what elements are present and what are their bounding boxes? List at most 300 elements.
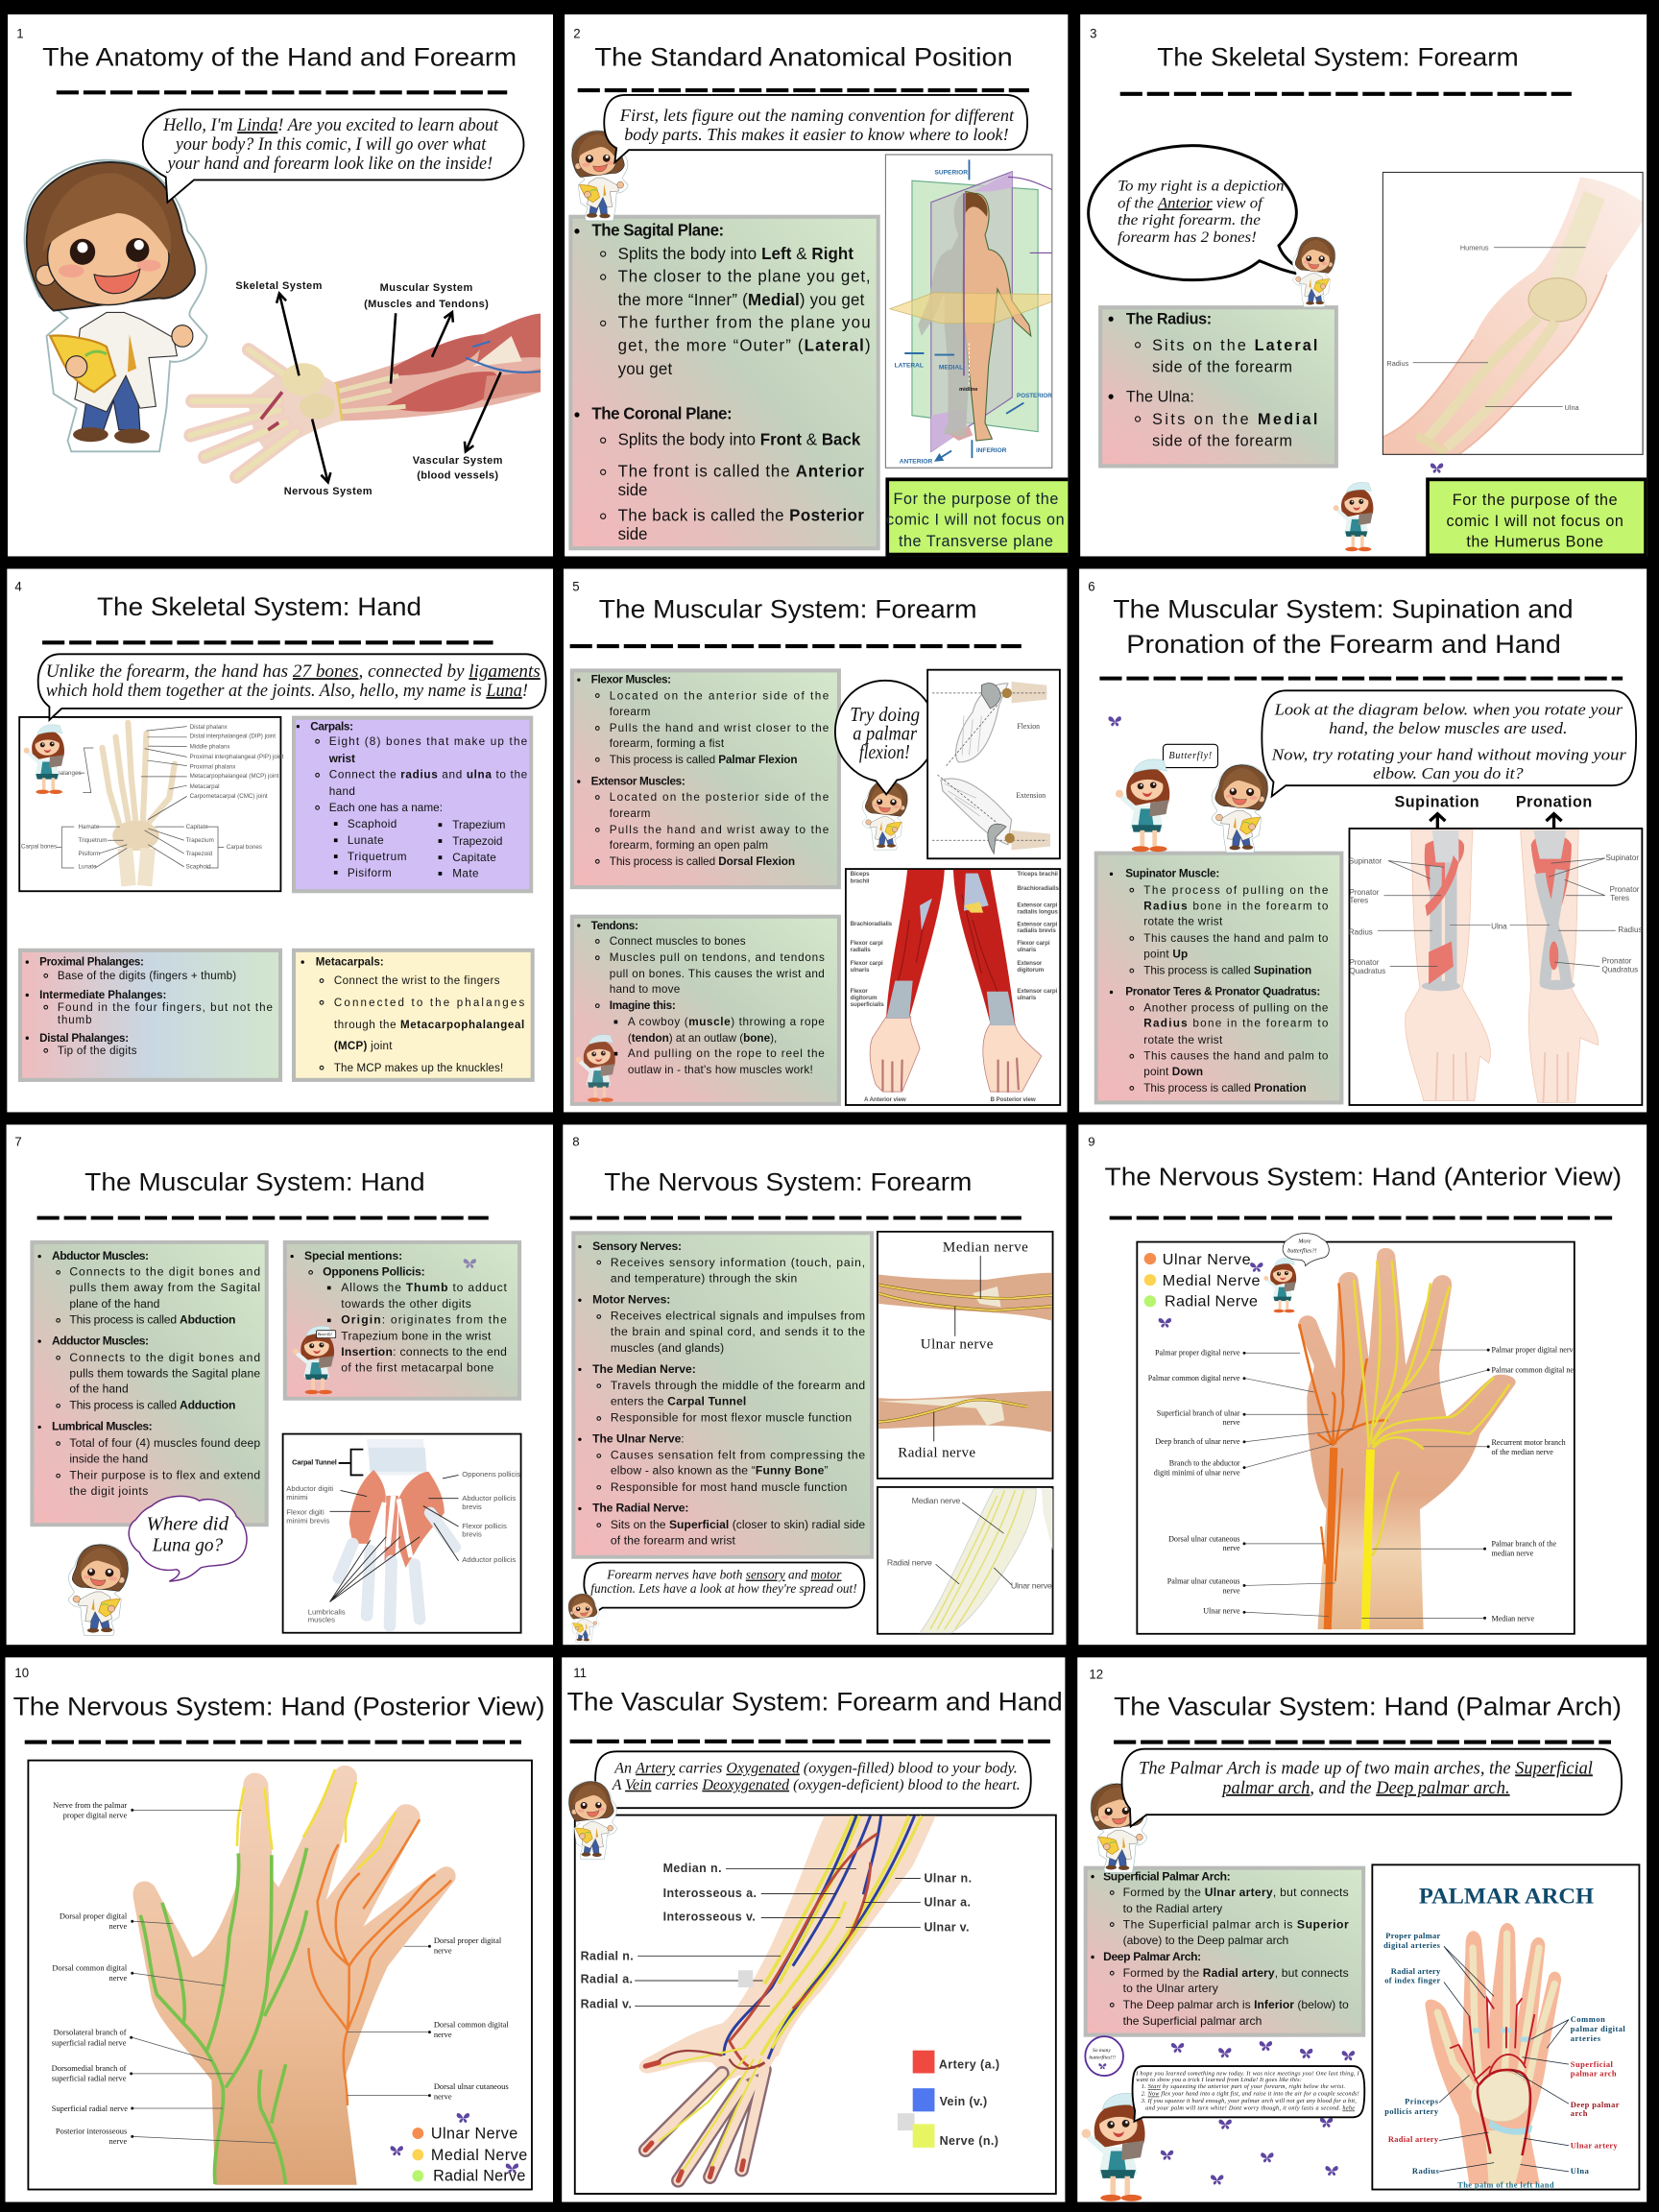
- purple bubble: so many butterflies: butterflies!!!: [1089, 2055, 1116, 2061]
- text box: flexor and extensor: Located on the posterior side of the: [610, 790, 830, 804]
- text box: tendons: (tendon) at an outlaw (bone),: [628, 1031, 777, 1045]
- text box: supinator and pronator: rotate the wrist: [1143, 1033, 1223, 1046]
- diagram: hand muscles: Opponens pollicis: [462, 1470, 520, 1479]
- text box: phalanges: Tip of the digits: [58, 1045, 137, 1057]
- text box: planes: The Coronal Plane:: [591, 404, 733, 423]
- illustration: median ulnar radial nerves: [878, 1232, 1053, 1479]
- text box: special mentions: Opponens Pollicis:: [323, 1265, 425, 1279]
- icon: butterfly: [506, 2163, 518, 2174]
- text box: carpals: Carpals:: [310, 719, 353, 733]
- nerve: radial green: [140, 1848, 307, 2184]
- text box: supinator and pronator: The process of pulling on the: [1143, 883, 1329, 897]
- text box: radius and ulna: side of the forearm: [1152, 433, 1292, 450]
- text box: abductor adductor lumbrical: [32, 1242, 267, 1525]
- text box: abductor adductor lumbrical: of the hand: [69, 1382, 129, 1396]
- page number 11: 11: [573, 1666, 587, 1680]
- diagram: posterior hand nerves: nerve: [108, 1973, 127, 1983]
- illustration: median ulnar radial nerves: Radial nerve: [898, 1446, 975, 1460]
- text box: planes: The closer to the plane you get,: [618, 267, 871, 286]
- diagram: hand muscles: Flexor digiti: [286, 1508, 325, 1516]
- character: Luna small: [293, 1326, 334, 1394]
- hand skeleton diagram: Triquetrum: [79, 837, 107, 844]
- text box: phalanges: Base of the digits (fingers + thumb): [58, 970, 236, 982]
- text box: palmar arches: The Superficial palmar arch is Superior: [1123, 1917, 1349, 1931]
- text box: flexor and extensor: This process is called Dorsal Flexion: [610, 854, 795, 868]
- diagram: posterior hand nerves: Dorsal ulnar cutaneous: [434, 2081, 509, 2091]
- note box: humerus: [1426, 477, 1647, 556]
- diagram: forearm muscles anterior and posterior: Biceps: [851, 871, 870, 878]
- legend: nerve colours: Medial Nerve: [1163, 1273, 1261, 1289]
- text box: metacarpals: Connected to the phalanges: [334, 997, 524, 1009]
- text box: tendons: [572, 917, 839, 1104]
- speech bubble: palmar flexion: [835, 681, 936, 795]
- speech bubble: palmar arch: The Palmar Arch is made up of two main arches, the Superficial: [1139, 1758, 1593, 1777]
- text box: abductor adductor lumbrical: inside the hand: [69, 1453, 148, 1466]
- diagram: hand muscles: minimi brevis: [286, 1517, 329, 1525]
- speech bubble: 27 bones: Unlike the forearm, the hand has 27 bones, connected by ligaments: [46, 662, 541, 682]
- speech bubble: artery and vein: A Vein carries Deoxygenated (oxygen-deficient) blood to the heart.: [612, 1777, 1021, 1793]
- diagram: hand muscles: Adductor pollicis: [462, 1555, 517, 1564]
- diagram: posterior hand nerves: Nerve from the palmar: [53, 1800, 127, 1810]
- speech bubble: palmar flexion: flexion!: [859, 742, 910, 763]
- tiny bubble: Butterfly: Butterfly!: [318, 1332, 333, 1336]
- diagram: anterior hand nerves: digiti minimi of ulnar nerve: [1154, 1469, 1240, 1477]
- diagram: anterior hand nerves: Palmar common digital nerve: [1492, 1365, 1584, 1374]
- hand skeleton diagram: Hamate: [79, 824, 100, 830]
- text box: flexor and extensor: Pulls the hand and wrist closer to the: [610, 721, 830, 734]
- hand skeleton diagram: Distal phalanx: [190, 724, 228, 731]
- diagram: forearm muscles anterior and posterior: Brachioradialis: [851, 921, 893, 927]
- diagram: flexion and extension: Extension: [1016, 791, 1046, 800]
- text box: palmar arches: Formed by the Radial artery, but connects: [1123, 1966, 1349, 1980]
- character: Luna on tendons box: [576, 1034, 615, 1102]
- diagram: forearm muscles anterior and posterior: Extensor carpi: [1017, 902, 1058, 908]
- legend: nerve colours: Radial Nerve: [433, 2168, 525, 2185]
- nerve: digital yellow: [237, 1769, 396, 1869]
- character: Linda small: [568, 1781, 617, 1859]
- speech bubble: closing trick: 1. Start by squeezing the anterior part of your forearm, right below the wrist.: [1142, 2083, 1345, 2090]
- diagram: forearm vessels and nerves: Radial v.: [581, 1997, 632, 2010]
- speech bubble: rotate your hand: Now, try rotating your hand without moving your: [1271, 745, 1626, 763]
- diagram: forearm vessels and nerves: [575, 1815, 1056, 2194]
- diagram: forearm vessels and nerves: Radial a.: [581, 1973, 633, 1986]
- legend: artery vein nerve: Nerve (n.): [940, 2134, 998, 2148]
- heading panel 1: The Anatomy of the Hand and Forearm: [42, 42, 517, 72]
- text box: flexor and extensor: forearm: [610, 806, 651, 820]
- hand skeleton diagram: Carpal bones: [21, 843, 57, 850]
- heading panel 11: The Vascular System: Forearm and Hand: [567, 1687, 1063, 1716]
- hand skeleton diagram: Lunate: [79, 864, 97, 871]
- diagram: posterior hand nerves: superficial radial nerve: [52, 2074, 127, 2083]
- diagram: forearm muscles anterior and posterior: ulnaris: [1017, 995, 1037, 1001]
- text box: special mentions: of the first metacarpal bone: [341, 1361, 494, 1375]
- diagram: anterior hand nerves: [1137, 1242, 1584, 1634]
- text box: palmar arches: The Deep palmar arch is Inferior (below) to: [1123, 1998, 1349, 2011]
- diagram: palmar arch hand: Radial artery: [1391, 1966, 1441, 1976]
- diagram: supination and pronation arms: Quadratus: [1349, 967, 1385, 975]
- diagram: forearm muscles anterior and posterior: superficialis: [851, 1001, 884, 1008]
- diagram: supination and pronation arms: Supinator: [1606, 854, 1639, 862]
- illustration: forearm nerves line drawing: Ulnar nerve: [1011, 1580, 1052, 1590]
- text box: palmar arches: to the Ulnar artery: [1123, 1982, 1219, 1995]
- diagram: anterior hand nerves: Palmar ulnar cutaneous: [1167, 1577, 1240, 1586]
- diagram: posterior hand nerves: [28, 1761, 532, 2190]
- diagram: posterior hand nerves: nerve: [108, 2136, 127, 2146]
- legend: nerve colours: Ulnar Nerve: [1163, 1252, 1251, 1268]
- note box: humerus: comic I will not focus on: [1446, 513, 1623, 530]
- speech bubble: closing trick: 3. If you squeeze it hard enough, your palmar arch will not get any blood for a bit,: [1141, 2098, 1357, 2104]
- text box: supinator and pronator: Supinator Muscle:: [1125, 867, 1219, 880]
- text box: nerves: Travels through the middle of the forearm and: [611, 1379, 865, 1392]
- cloud bubble: where did Luna go: [129, 1496, 247, 1581]
- panel 2: standard anatomical position: [565, 14, 1068, 556]
- text box: abductor adductor lumbrical: This process is called Adduction: [69, 1399, 235, 1411]
- diagram: anatomical planes: INFERIOR: [976, 447, 1007, 454]
- text box: special mentions: Special mentions:: [304, 1249, 402, 1262]
- page number 12: 12: [1089, 1667, 1103, 1681]
- diagram: forearm vessels and nerves: Ulnar v.: [924, 1921, 969, 1935]
- text box: metacarpals: (MCP) joint: [334, 1040, 393, 1052]
- diagram: forearm muscles anterior and posterior: Extensor carpi: [1017, 921, 1058, 927]
- diagram: posterior hand nerves: Dorsal proper digital: [434, 1936, 502, 1945]
- nerve: median yellow: [1354, 1261, 1510, 1629]
- text box: radius and ulna: Sits on the Lateral: [1152, 337, 1317, 354]
- hand skeleton diagram: [19, 717, 284, 891]
- speech bubble: forearm bones: the right forearm. the: [1118, 212, 1261, 228]
- text box: radius and ulna: side of the forearm: [1152, 358, 1292, 376]
- diagram: hand muscles: Lumbricalis: [308, 1608, 346, 1616]
- page number 3: 3: [1090, 26, 1096, 41]
- heading panel 10: The Nervous System: Hand (Posterior View): [13, 1692, 545, 1720]
- diagram: forearm muscles anterior and posterior: ulnaris: [851, 967, 870, 974]
- hand skeleton diagram: Capitate: [186, 824, 208, 830]
- text box: carpals: Scaphoid: [348, 817, 397, 830]
- text box: abductor adductor lumbrical: pulls them away from the Sagital: [69, 1281, 260, 1294]
- text box: tendons: hand to move: [610, 982, 681, 996]
- diagram: posterior hand nerves: nerve: [108, 1921, 127, 1931]
- panel 5: muscular system forearm: [564, 568, 1068, 1112]
- hand skeleton diagram: Phalanges: [53, 770, 82, 777]
- character: Linda small: [568, 1594, 599, 1643]
- text box: special mentions: Allows the Thumb to adduct: [341, 1281, 508, 1294]
- text box: flexor and extensor: Flexor Muscles:: [591, 672, 671, 686]
- diagram: forearm muscles anterior and posterior: Flexor: [851, 988, 868, 995]
- diagram: posterior hand nerves: nerve: [434, 1946, 452, 1956]
- diagram: forearm vessels and nerves: Radial n.: [581, 1949, 634, 1962]
- hand skeleton diagram: Distal interphalangeal (DIP) joint: [190, 733, 276, 740]
- diagram: forearm muscles anterior and posterior: B Posterior view: [991, 1096, 1036, 1103]
- text box: planes: The Sagital Plane:: [591, 221, 724, 239]
- diagram: forearm muscles anterior and posterior: Flexor carpi: [1017, 940, 1050, 947]
- heading panel 8: The Nervous System: Forearm: [604, 1167, 972, 1196]
- diagram: anterior hand nerves: Branch to the abductor: [1169, 1459, 1240, 1467]
- diagram: palmar arch hand: arch: [1571, 2108, 1588, 2118]
- speech bubble: rotate your hand: elbow. Can you do it?: [1373, 764, 1524, 782]
- text box: planes: side: [618, 525, 647, 543]
- diagram: posterior hand nerves: superficial radial nerve: [52, 2037, 127, 2047]
- text box: planes: get, the more “Outer” (Lateral): [618, 337, 871, 355]
- legend: artery vein nerve: Vein (v.): [940, 2095, 987, 2108]
- text box: supinator and pronator: Pronator Teres & Pronator Quadratus:: [1125, 984, 1320, 998]
- text box: carpals: Each one has a name:: [329, 801, 443, 814]
- label: Supination with arrow: Supination: [1394, 793, 1479, 811]
- text box: tendons: pull on bones. This causes the wrist and: [610, 967, 825, 980]
- diagram: palmar arch hand: arteries: [1571, 2033, 1601, 2043]
- label: Muscular System with arrows: Muscular System: [380, 282, 472, 294]
- text box: nerves: [573, 1233, 872, 1557]
- page number 5: 5: [572, 580, 580, 594]
- heading panel 12: The Vascular System: Hand (Palmar Arch): [1114, 1692, 1622, 1720]
- text box: tendons: A cowboy (muscle) throwing a rope: [628, 1015, 825, 1028]
- text box: supinator and pronator: Another process of pulling on the: [1143, 1001, 1329, 1015]
- note box: transverse plane: comic I will not focus on: [886, 512, 1065, 529]
- hand skeleton diagram: Carpometacarpal (CMC) joint: [190, 793, 268, 800]
- text box: planes: The further from the plane you: [618, 313, 871, 332]
- text box: supinator and pronator: Radius bone in the forearm to: [1143, 1017, 1329, 1030]
- speech bubble: artery and vein: [595, 1751, 1031, 1819]
- diagram: anterior hand nerves: Palmar proper digital nerve: [1492, 1346, 1577, 1355]
- illustration: hand and forearm anatomy: [190, 314, 541, 477]
- icon: butterfly: [457, 2113, 469, 2123]
- speech bubble: forearm bones: [1089, 146, 1302, 280]
- butterflies swarm: [1161, 2041, 1355, 2184]
- label: Pronation with arrow: [1516, 793, 1592, 830]
- illustration: forearm nerves line drawing: Radial nerve: [887, 1558, 932, 1568]
- text box: radius and ulna: The Ulna:: [1126, 388, 1194, 405]
- text box: abductor adductor lumbrical: the digit joints: [69, 1484, 148, 1498]
- text box: supinator and pronator: Radius bone in the forearm to: [1143, 900, 1329, 913]
- text box: nerves: enters the Carpal Tunnel: [611, 1395, 746, 1408]
- panel 11: vascular system forearm and hand: [562, 1657, 1065, 2202]
- speech bubble: palmar arch: [1122, 1749, 1622, 1827]
- text box: flexor and extensor: Located on the anterior side of the: [610, 688, 830, 702]
- diagram: supination and pronation arms: Quadratus: [1601, 966, 1638, 974]
- diagram: supination and pronation arms: Supinator: [1349, 856, 1382, 866]
- text box: nerves: muscles (and glands): [611, 1341, 724, 1355]
- purple bubble: so many butterflies: [1085, 2036, 1123, 2076]
- text box: nerves: Responsible for most flexor muscle function: [611, 1411, 852, 1425]
- diagram: hand muscles: brevis: [462, 1503, 482, 1511]
- diagram: posterior hand nerves: Dorsal common digital: [434, 2019, 509, 2029]
- cloud bubble: more butterflies: More: [1297, 1239, 1311, 1245]
- character: Luna in frame: [24, 725, 64, 794]
- text box: nerves: The Radial Nerve:: [592, 1502, 688, 1515]
- diagram: supination and pronation arms: Radius: [1349, 927, 1373, 936]
- diagram: anatomical planes: ANTERIOR: [900, 458, 932, 465]
- panel 9: nervous system hand anterior: [1078, 1124, 1647, 1645]
- text box: supinator and pronator: rotate the wrist: [1143, 915, 1223, 928]
- text box: phalanges: [20, 950, 280, 1080]
- text box: tendons: outlaw in - that's how muscles work!: [628, 1063, 813, 1076]
- text box: planes: the more “Inner” (Medial) you get: [618, 291, 865, 309]
- character: Linda flipped: [1292, 237, 1335, 307]
- speech bubble: palmar flexion: a palmar: [853, 723, 918, 744]
- diagram: hand muscles: [283, 1434, 521, 1633]
- text box: carpals: Connect the radius and ulna to the: [329, 768, 528, 781]
- illustration: forearm bones: Humerus: [1460, 243, 1489, 252]
- illustration: forearm bones: Radius: [1386, 359, 1409, 368]
- speech bubble: Linda intro: your hand and forearm look like on the inside!: [166, 154, 493, 174]
- text box: planes: Splits the body into Left & Right: [618, 245, 854, 263]
- text box: special mentions: towards the other digits: [341, 1297, 471, 1310]
- diagram: anterior hand nerves: Median nerve: [1492, 1615, 1535, 1623]
- speech bubble: sensory and motor: Forearm nerves have both sensory and motor: [606, 1568, 842, 1582]
- illustration: forearm nerves line drawing: Median nerve: [912, 1496, 960, 1505]
- text box: flexor and extensor: forearm: [610, 705, 651, 718]
- text box: special mentions: Insertion: connects to the end: [341, 1345, 507, 1358]
- text box: carpals: Eight (8) bones that make up the: [329, 734, 528, 748]
- text box: carpals: wrist: [328, 752, 355, 765]
- label: Muscular System with arrows: [364, 282, 489, 384]
- note box: transverse plane: [885, 477, 1068, 556]
- text box: abductor adductor lumbrical: Lumbrical Muscles:: [52, 1420, 153, 1433]
- diagram: forearm muscles anterior and posterior: [846, 869, 1060, 1105]
- diagram: anterior hand nerves: Dorsal ulnar cutaneous: [1168, 1534, 1240, 1543]
- cloud bubble: more butterflies: butterflies?!: [1287, 1247, 1317, 1254]
- text box: carpals: Triquetrum: [348, 850, 407, 863]
- icon: butterfly gray: [464, 1259, 476, 1268]
- speech bubble: Linda intro: Hello, I'm Linda! Are you excited to learn about: [162, 115, 499, 135]
- speech bubble: closing trick: and your palm will turn white! Dont worry though, it only lasts a second. hehe: [1145, 2104, 1355, 2111]
- panel 1: anatomy of the hand and forearm: [8, 14, 553, 556]
- hand skeleton diagram: Proximal interphalangeal (PIP) joint: [190, 754, 284, 760]
- small bubble: Butterfly: [1164, 744, 1217, 768]
- diagram: anatomical planes: MEDIAL: [939, 364, 963, 372]
- text box: nerves: Receives electrical signals and impulses from: [611, 1310, 865, 1323]
- diagram: posterior hand nerves: Dorsal common digital: [52, 1963, 128, 1973]
- speech bubble: forearm bones: forearm has 2 bones!: [1118, 229, 1257, 246]
- diagram: forearm muscles anterior and posterior: Flexor carpi: [851, 960, 883, 967]
- diagram: palmar arch hand: Ulnar artery: [1571, 2141, 1618, 2151]
- text box: supinator and pronator: This process is called Pronation: [1143, 1081, 1307, 1094]
- text box: flexor and extensor: forearm, forming a fist: [610, 736, 725, 750]
- text box: abductor adductor lumbrical: Adductor Muscles:: [52, 1334, 149, 1348]
- text box: radius and ulna: Sits on the Medial: [1152, 411, 1317, 428]
- text box: palmar arches: [1086, 1868, 1363, 2035]
- diagram: palmar arch hand: Ulna: [1571, 2166, 1590, 2176]
- small bubble: Butterfly: Butterfly!: [1168, 751, 1212, 761]
- label: Vascular System with arrow: Vascular System: [413, 455, 503, 467]
- hand skeleton diagram: Scaphoid: [186, 864, 211, 871]
- label: Pronation with arrow: Pronation: [1516, 793, 1592, 811]
- text box: flexor and extensor: Pulls the hand and wrist away to the: [610, 823, 830, 836]
- label: Vascular System with arrow: (blood vessels): [417, 469, 498, 482]
- speech bubble: 27 bones: [38, 654, 546, 720]
- text box: nerves: Motor Nerves:: [592, 1293, 670, 1306]
- diagram: hand muscles: Abductor pollicis: [462, 1494, 517, 1503]
- diagram: supination and pronation arms: Radius: [1618, 926, 1642, 934]
- text box: phalanges: thumb: [58, 1014, 92, 1026]
- text box: palmar arches: (above) to the Deep palmar arch: [1123, 1934, 1288, 1947]
- diagram: anterior hand nerves: Palmar proper digital nerve: [1155, 1349, 1240, 1357]
- page number 9: 9: [1088, 1135, 1095, 1149]
- legend: nerve colours: [412, 2126, 527, 2185]
- text box: phalanges: Found in the four fingers, but not the: [58, 1001, 273, 1014]
- text box: palmar arches: Deep Palmar Arch:: [1103, 1950, 1201, 1963]
- page number 2: 2: [573, 26, 581, 41]
- diagram: supination and pronation arms: Teres: [1610, 894, 1629, 902]
- diagram: forearm muscles anterior and posterior: Flexor carpi: [851, 940, 883, 947]
- diagram: forearm muscles anterior and posterior: radialis: [851, 947, 871, 953]
- diagram: anterior hand nerves: Superficial branch of ulnar: [1157, 1408, 1240, 1417]
- text box: abductor adductor lumbrical: Connects to the digit bones and: [69, 1351, 260, 1364]
- diagram: forearm muscles anterior and posterior: Triceps brachii: [1017, 871, 1058, 878]
- icon: butterfly: [1109, 716, 1121, 726]
- diagram: forearm vessels and nerves: Ulnar n.: [924, 1872, 972, 1886]
- diagram: supination and pronation arms: Ulna: [1491, 922, 1507, 930]
- text box: special mentions: Origin: originates from the: [341, 1313, 507, 1327]
- character: Luna: [1334, 482, 1373, 551]
- panel 4: skeletal system hand: [7, 568, 553, 1112]
- diagram: anatomical planes: SUPERIOR: [934, 169, 968, 176]
- diagram: anterior hand nerves: nerve: [1223, 1418, 1240, 1427]
- text box: tendons: Connect muscles to bones: [610, 934, 746, 948]
- diagram: anterior hand nerves: Recurrent motor branch: [1492, 1438, 1566, 1447]
- diagram: anterior hand nerves: median nerve: [1492, 1550, 1534, 1558]
- text box: supinator and pronator: point Down: [1143, 1065, 1203, 1078]
- text box: nerves: and temperature) through the skin: [611, 1272, 797, 1286]
- panel 12: vascular system palmar arch: [1077, 1657, 1647, 2202]
- diagram: palmar arch hand: Proper palmar: [1385, 1931, 1440, 1940]
- diagram: anatomical planes: LATERAL: [895, 363, 924, 370]
- diagram: forearm muscles anterior and posterior: digitorum: [1017, 967, 1045, 974]
- text box: supinator and pronator: This process is called Supination: [1143, 963, 1311, 976]
- text box: planes: you get: [618, 360, 672, 378]
- page number 7: 7: [14, 1135, 22, 1149]
- text box: nerves: Sensory Nerves:: [592, 1239, 682, 1253]
- character: Linda large: [24, 160, 207, 451]
- character: Luna: [1263, 1258, 1296, 1312]
- text box: tendons: Tendons:: [591, 919, 638, 932]
- diagram: flexion and extension: [927, 670, 1060, 858]
- panel 10: nervous system hand posterior: [6, 1657, 553, 2202]
- text box: nerves: elbow - also known as the “Funny Bone”: [611, 1464, 829, 1478]
- text box: metacarpals: through the Metacarpophalangeal: [334, 1019, 524, 1031]
- speech bubble: closing trick: [1133, 2066, 1364, 2122]
- text box: metacarpals: [294, 950, 533, 1080]
- hand skeleton diagram: Middle phalanx: [190, 744, 230, 751]
- text box: tendons: Muscles pull on tendons, and tendons: [610, 950, 825, 964]
- cloud bubble: where did Luna go: Luna go?: [152, 1535, 223, 1556]
- diagram: hand muscles: Flexor pollicis: [462, 1522, 507, 1530]
- text box: palmar arches: to the Radial artery: [1123, 1902, 1223, 1915]
- hand skeleton diagram: Metacarpophalangeal (MCP) joint: [190, 773, 279, 780]
- speech bubble: palmar arch: palmar arch, and the Deep palmar arch.: [1220, 1778, 1510, 1797]
- diagram: palmar arch hand: pollicis artery: [1384, 2106, 1439, 2116]
- diagram: palmar arch hand: Radial artery: [1388, 2134, 1439, 2144]
- text box: carpals: Capitate: [452, 851, 496, 864]
- text box: planes: side: [618, 481, 647, 499]
- text box: abductor adductor lumbrical: Abductor Muscles:: [52, 1249, 149, 1262]
- speech bubble: naming convention: First, lets figure out the naming convention for different: [619, 106, 1015, 125]
- text box: nerves: Sits on the Superficial (closer to skin) radial side: [611, 1518, 865, 1531]
- diagram: forearm muscles anterior and posterior: ulnaris: [1017, 947, 1037, 953]
- character: Linda small: [571, 131, 628, 221]
- diagram: posterior hand nerves: Dorsal proper digital: [60, 1911, 128, 1921]
- text box: nerves: Responsible for most hand muscle function: [611, 1480, 847, 1494]
- speech bubble: rotate your hand: Look at the diagram below. when you rotate your: [1274, 700, 1623, 718]
- label: Vascular System with arrow: [413, 373, 503, 482]
- legend: nerve colours: Radial Nerve: [1165, 1294, 1258, 1310]
- legend: artery vein nerve: Artery (a.): [939, 2057, 999, 2071]
- hand skeleton diagram: Pisiform: [79, 851, 100, 857]
- text box: nerves: Causes sensation felt from compressing the: [611, 1449, 865, 1462]
- nerve: ulnar orange: [308, 1819, 451, 2105]
- text box: flexor and extensor: Extensor Muscles:: [591, 774, 685, 787]
- text box: carpals: [294, 718, 531, 891]
- text box: tendons: And pulling on the rope to reel the: [628, 1046, 825, 1060]
- panel 6: supination and pronation: [1079, 568, 1647, 1112]
